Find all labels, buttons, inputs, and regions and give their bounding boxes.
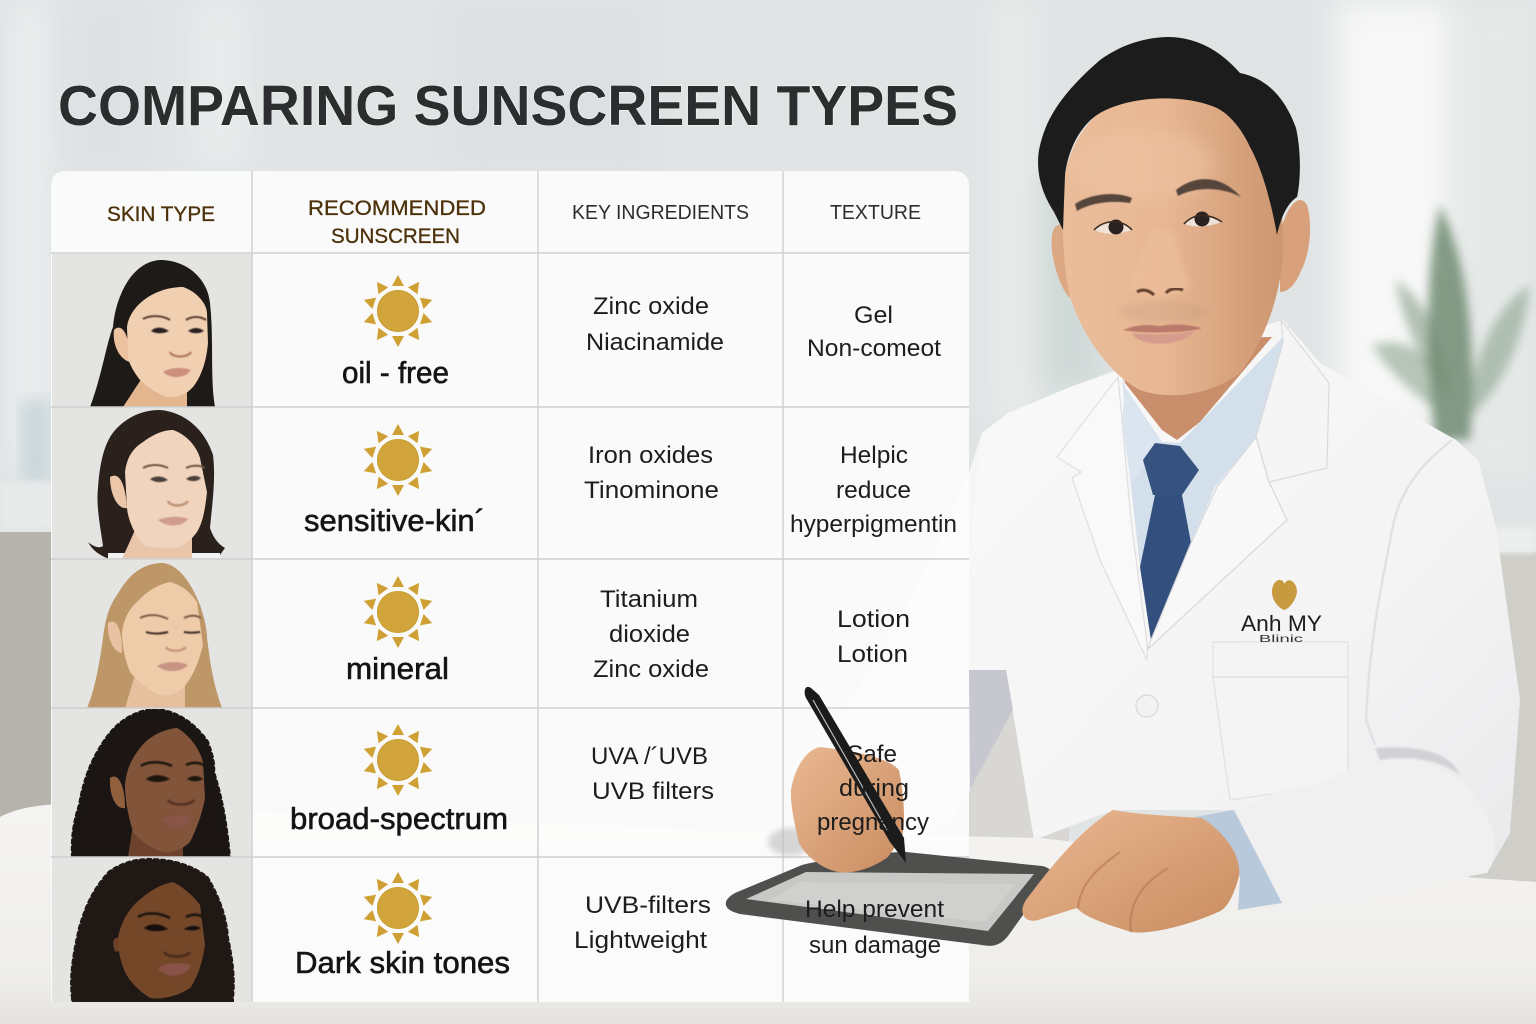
panel background: [51, 171, 969, 1002]
hair: [1038, 37, 1300, 235]
plant in background: [1372, 205, 1530, 440]
row 3 ingredients: Zinc oxide: [593, 656, 709, 683]
neck: [1118, 337, 1272, 440]
coat logo mark: [1241, 580, 1322, 645]
right wall panel: [1470, 552, 1536, 892]
coat pocket: [1213, 642, 1348, 800]
row 2 texture: Helpic: [840, 442, 908, 469]
doctor's coat body: [969, 320, 1520, 915]
row 4 texture text: during: [839, 775, 909, 802]
row 2 texture: reduce: [836, 477, 911, 504]
right ear: [1280, 200, 1310, 292]
sleeve underside shadow: [969, 670, 1013, 790]
row 3 ingredients: [593, 586, 709, 683]
row 4 recommendation: broad-spectrum: [290, 724, 508, 836]
row 4 ingredients: [591, 743, 714, 805]
panel: comparison table: [51, 171, 969, 1004]
row 1 recommendation: oil-free: [342, 275, 449, 390]
right hand: [1022, 810, 1239, 933]
necktie: [1140, 443, 1199, 640]
header: texture: TEXTURE: [830, 202, 921, 224]
row 3 ingredients: Titanium: [600, 586, 698, 613]
left ear: [1052, 225, 1070, 298]
row 5 texture text: Help prevent: [805, 896, 944, 923]
coat logo mark: Blinic: [1259, 634, 1303, 645]
portrait: dark skin tones: [72, 860, 233, 1004]
header: recommended sunscreen: SUNSCREEN: [331, 225, 460, 248]
row 3 ingredients: dioxide: [609, 621, 690, 648]
row 3 recommendation: mineral: [346, 576, 449, 686]
row 1 ingredients: Zinc oxide: [593, 293, 709, 320]
row 2 recommendation: sensitive skin: sensitive-kin´: [304, 503, 485, 538]
row 1 texture: Gel: [854, 302, 893, 329]
mouth: [1123, 325, 1202, 344]
shirt: [1122, 322, 1290, 640]
row 1 recommendation: oil-free: oil - free: [342, 355, 449, 390]
coat button: [1136, 695, 1158, 717]
left wall panel: [0, 532, 52, 822]
header: key ingredients: KEY INGREDIENTS: [572, 202, 749, 224]
coat logo mark: Anh MY: [1241, 611, 1322, 636]
row 2 ingredients: Iron oxides: [588, 442, 713, 469]
nose: [1128, 230, 1190, 297]
brows: [1075, 179, 1241, 211]
row 1 ingredients: [586, 293, 724, 356]
row 3 texture: [837, 606, 910, 668]
forehead highlight: [1075, 129, 1215, 201]
face: [1062, 90, 1283, 395]
row 3 recommendation: mineral: mineral: [346, 651, 449, 686]
right coat collar: [1256, 320, 1329, 482]
eyes: [1094, 212, 1222, 234]
row 2 recommendation: sensitive skin: [304, 424, 485, 538]
row 3 texture: Lotion: [837, 641, 908, 668]
moustache shadow: [1119, 301, 1207, 323]
header: recommended sunscreen: [308, 197, 486, 248]
table grid lines: [51, 171, 969, 1002]
portrait: broad-spectrum skin type: [73, 710, 229, 857]
row 5 ingredients: Lightweight: [574, 927, 707, 954]
right coat lapel: [1147, 437, 1287, 650]
shirt cuff: [1195, 810, 1282, 910]
doctor's writing hand and pen: [768, 687, 906, 872]
row 1 texture: Non-comeot: [807, 335, 941, 362]
hand shadow: [768, 828, 812, 856]
header: recommended sunscreen: RECOMMENDED: [308, 197, 486, 220]
portrait: sensitive skin type: [88, 410, 225, 559]
row 4 texture text: [817, 741, 929, 836]
row 4 ingredients: UVA /´UVB: [591, 743, 708, 770]
white desk: [0, 804, 1536, 1024]
right forearm: [1234, 745, 1495, 915]
doctor's right hand and cuff: [1022, 810, 1282, 933]
header: skin type: SKIN TYPE: [107, 203, 215, 226]
elbow fold: [1375, 747, 1460, 775]
coat left sleeve: [795, 433, 1013, 860]
row 5 recommendation: dark skin tones: [295, 872, 510, 980]
photo column background: [52, 254, 252, 1002]
doctor head: [1038, 37, 1310, 395]
row 5 ingredients: [574, 892, 711, 954]
row 5 texture text: [805, 896, 944, 959]
row 2 texture: [790, 442, 957, 538]
row 2 ingredients: Tinominone: [584, 477, 719, 504]
row 3 texture: Lotion: [837, 606, 910, 633]
row 5 recommendation: dark skin tones: Dark skin tones: [295, 945, 510, 980]
row 1 ingredients: Niacinamide: [586, 329, 724, 356]
row 4 recommendation: broad-spectrum: broad-spectrum: [290, 801, 508, 836]
tablet on desk: [726, 852, 1051, 946]
right arm seam: [1366, 440, 1452, 745]
wall behind left arm: [969, 640, 1069, 850]
row 4 ingredients: UVB filters: [592, 778, 714, 805]
title: COMPARING SUNSCREEN TYPES: [58, 74, 958, 138]
left coat lapel: [1057, 377, 1147, 660]
row 4 texture text: Safe: [847, 741, 897, 768]
portrait: oil-free skin type: [90, 260, 215, 407]
doctor figure: coat, shirt and tie: [795, 320, 1520, 915]
row 2 texture: hyperpigmentin: [790, 511, 957, 538]
row 5 ingredients: UVB-filters: [585, 892, 711, 919]
row 4 texture text: pregnancy: [817, 809, 929, 836]
portrait: mineral skin type: [87, 563, 222, 708]
row 1 texture: [807, 302, 941, 362]
row 5 texture text: sun damage: [809, 932, 941, 959]
row 2 ingredients: [584, 442, 719, 504]
